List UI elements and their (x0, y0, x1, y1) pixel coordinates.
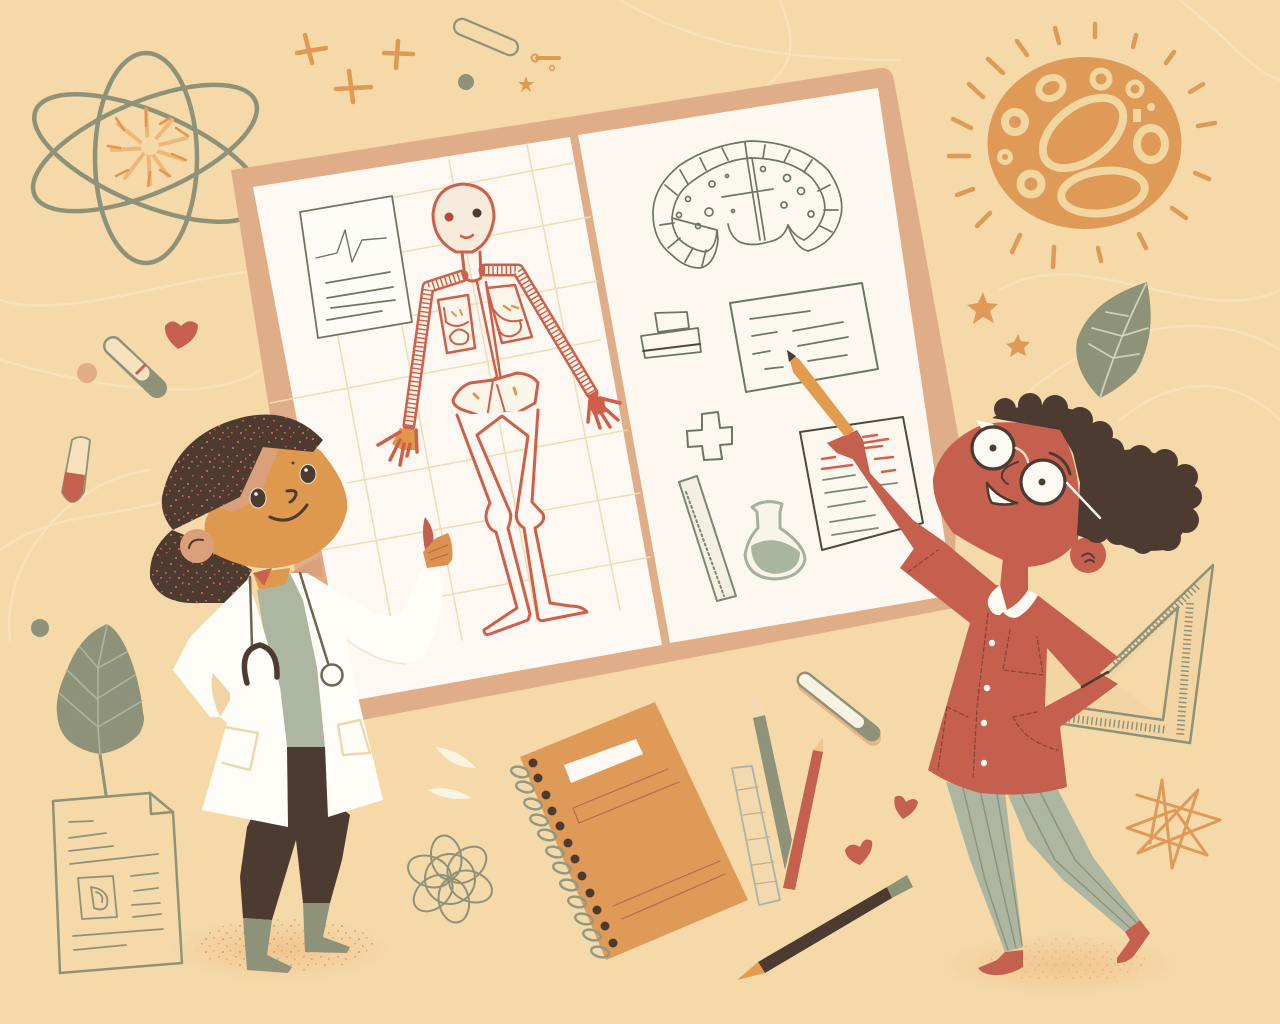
panel: open notebook (231, 68, 965, 728)
icon: medical cross (687, 412, 732, 460)
legs (240, 745, 350, 920)
right lung (487, 285, 532, 343)
ear (1070, 537, 1106, 573)
ear (180, 529, 214, 563)
icon: stars (967, 292, 1030, 357)
icon: paper clip (452, 16, 520, 58)
face (204, 444, 347, 568)
icon: dark pencil (737, 875, 913, 980)
stethoscope (244, 573, 342, 686)
icon: capsule (113, 346, 157, 388)
gap between arm and body (1045, 648, 1082, 707)
neck (1000, 558, 1028, 593)
icon: dot (77, 363, 97, 383)
ear curl (1082, 553, 1094, 562)
back hair (150, 530, 252, 603)
shoes (978, 920, 1150, 975)
neck and spine (462, 252, 505, 410)
icon: text card (730, 283, 878, 392)
icon: plus marks (297, 35, 413, 102)
icon: brain cross-section (653, 141, 842, 268)
icon: heart left (165, 321, 198, 349)
lab coat (173, 567, 444, 827)
eyes, nose and smile (250, 462, 316, 520)
icon: set square (1047, 565, 1213, 743)
left lung (438, 295, 475, 353)
icon: cell sun (949, 24, 1215, 267)
icon: small doodles (458, 54, 559, 92)
hand (827, 430, 863, 462)
left hand (378, 428, 417, 465)
icon: scribble star (1127, 780, 1220, 868)
character: student (787, 350, 1202, 997)
boots (243, 903, 350, 973)
icon: capsule lower (805, 680, 873, 738)
character: doctor (150, 414, 452, 982)
icon: spiral notebook (510, 702, 748, 960)
raised arm (827, 430, 943, 552)
pencil (787, 350, 854, 438)
hand thumbs up (423, 517, 452, 568)
left arm bones (409, 276, 462, 425)
icon: medical report page (300, 196, 412, 338)
skull (433, 184, 494, 252)
icon: small hearts (845, 796, 918, 865)
pelvis (453, 373, 538, 418)
icon: test tube (62, 437, 90, 502)
icon: flask (745, 502, 805, 579)
icon: pencils and ruler (732, 698, 823, 905)
trousers (946, 782, 1140, 952)
collar (988, 585, 1038, 618)
ground shadow (940, 933, 1180, 997)
icon: text sheet with red highlights (800, 417, 923, 550)
icon: plant leaf left (57, 624, 144, 795)
icon: ruler (679, 476, 736, 601)
head (933, 422, 1080, 567)
face shading (215, 447, 278, 512)
icon: document bottom left (53, 793, 182, 973)
icon: stamp (641, 312, 701, 358)
icon: ribbon doodle (404, 833, 496, 925)
curly hair (992, 393, 1202, 554)
glasses and face (972, 420, 1100, 518)
icon: leaf right (1076, 282, 1151, 398)
icon: atom (17, 53, 278, 263)
hair (162, 414, 323, 530)
right hand (588, 394, 620, 428)
icon: white brush marks (428, 747, 476, 799)
icon: small dot left (31, 619, 49, 637)
legs (457, 410, 587, 634)
right arm bones (485, 270, 592, 393)
tunic details (908, 550, 1108, 780)
neck and collar (253, 557, 323, 595)
chart: skeleton anatomy diagram (378, 184, 620, 634)
tunic (900, 541, 1118, 795)
ground shadow (170, 918, 390, 982)
shirt (257, 573, 325, 747)
